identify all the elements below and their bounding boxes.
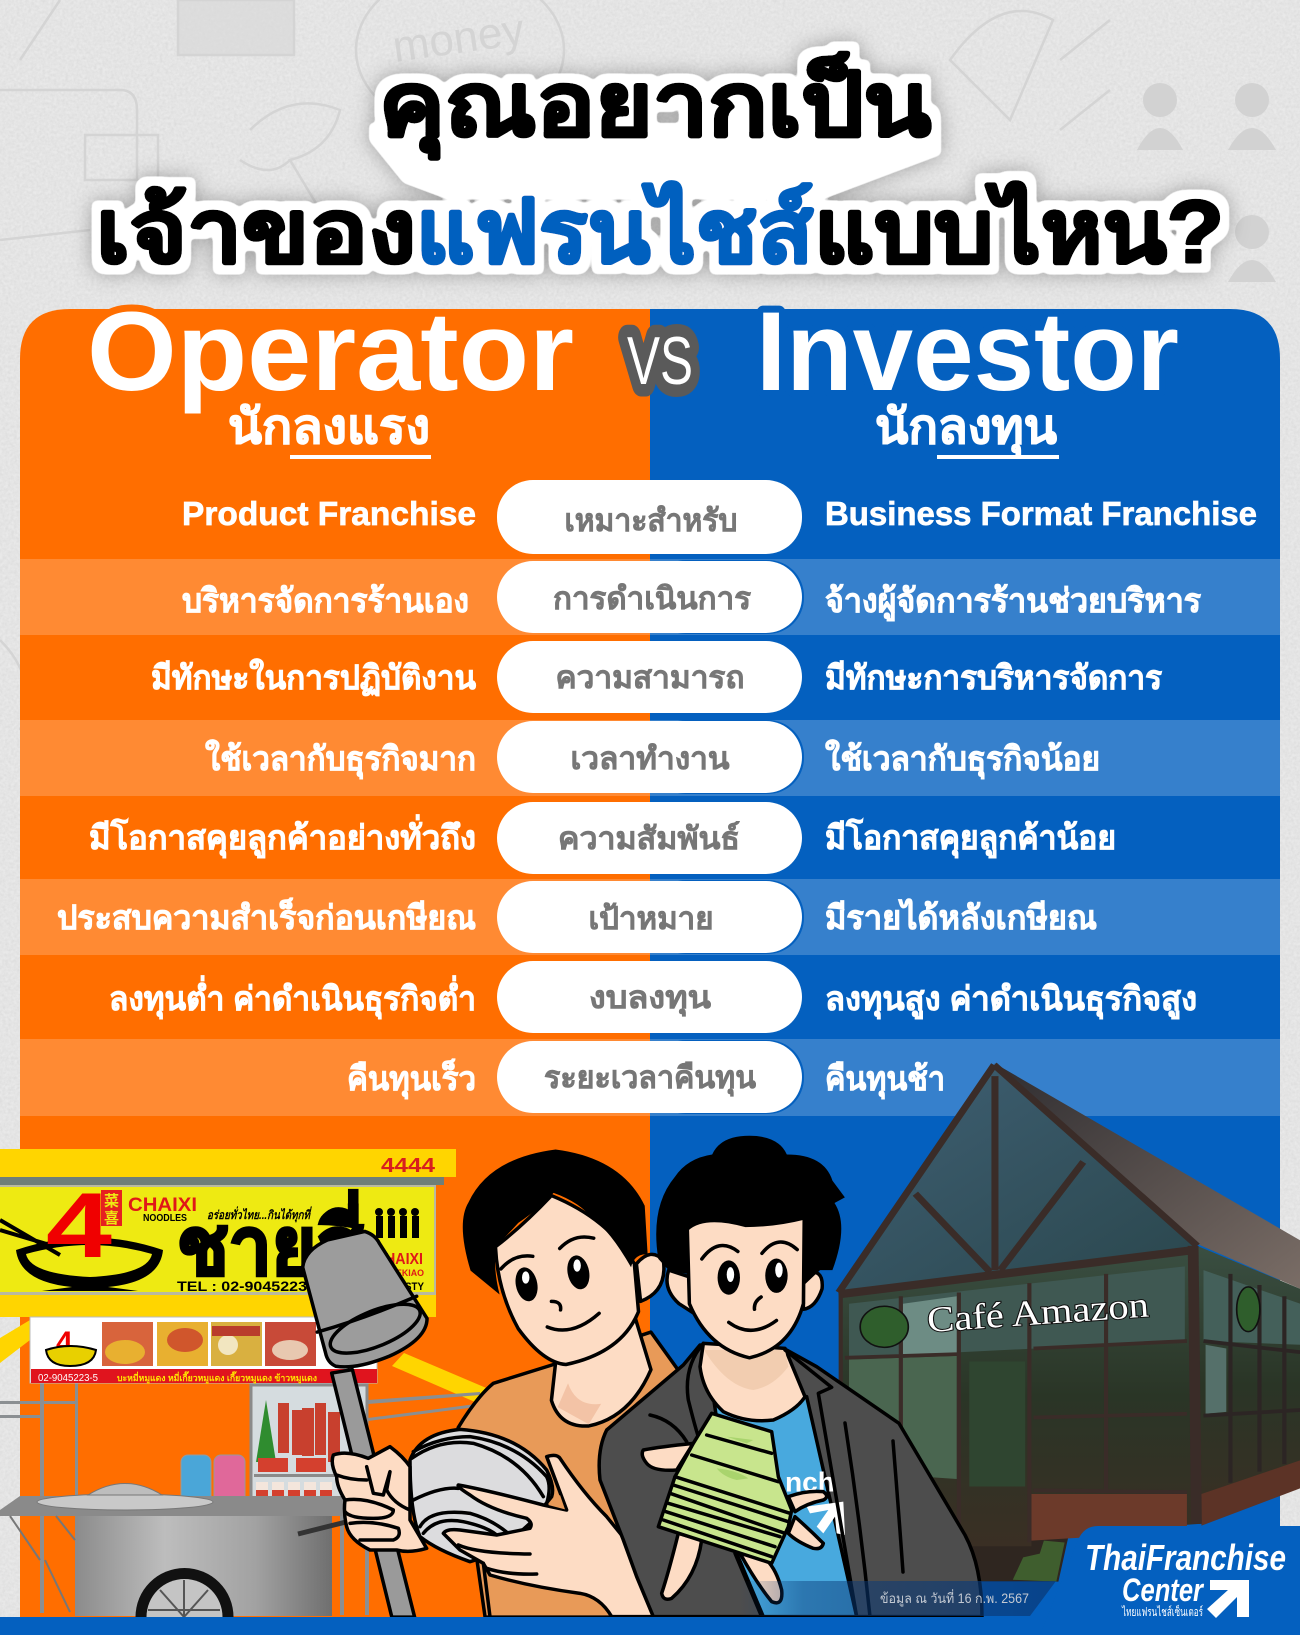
investor row labels: ใช้เวลากับธุรกิจน้อย xyxy=(825,739,1100,780)
investor row labels: Business Format Franchise xyxy=(825,495,1257,532)
face xyxy=(687,1218,804,1358)
operator row labels: Product Franchise xyxy=(182,495,476,532)
investor row labels: มีทักษะการบริหารจัดการ xyxy=(825,659,1162,696)
front wall xyxy=(839,1246,1201,1546)
pill labels: การดำเนินการ xyxy=(553,581,751,616)
sign board: 菜 xyxy=(104,1193,119,1210)
sign board: EKIAO xyxy=(396,1268,424,1278)
sign bowl xyxy=(16,1238,163,1291)
sign board: 喜 xyxy=(104,1209,119,1227)
menu board xyxy=(30,1317,377,1384)
jacket lines xyxy=(650,1343,903,1617)
operator row labels: บริหารจัดการร้านเอง xyxy=(182,582,469,619)
investor row labels: จ้างผู้จัดการร้านช่วยบริหาร xyxy=(825,582,1201,622)
sign board: NOODLES xyxy=(143,1213,187,1224)
sign board: 4 xyxy=(46,1175,112,1277)
operator row labels: คืนทุนเร็ว xyxy=(347,1058,476,1100)
ears xyxy=(667,1270,694,1313)
brows, nose, smile xyxy=(702,1242,797,1330)
cafe sign: Café Amazon xyxy=(926,1285,1150,1340)
sign board: HAIXI xyxy=(385,1251,423,1268)
building frame xyxy=(839,1065,1197,1542)
operator row labels: มีโอกาสคุยลูกค้าอย่างทั่วถึง xyxy=(89,814,476,859)
investor row labels: คืนทุนช้า xyxy=(825,1060,945,1100)
vs badge: VS xyxy=(627,323,693,399)
tiffin carriers xyxy=(181,1455,245,1508)
jacket xyxy=(599,1345,982,1617)
illustration: operator character xyxy=(303,1149,705,1617)
row stripes xyxy=(20,559,1280,1116)
logo: thaifranchise center xyxy=(1040,1526,1300,1635)
pill labels: งบลงทุน xyxy=(589,980,711,1017)
face xyxy=(495,1196,638,1365)
cart roof: 4444 xyxy=(381,1155,436,1177)
subheading: investor thai: นักลงทุน xyxy=(875,401,1057,457)
pill labels: เป้าหมาย xyxy=(588,901,714,936)
heading: Investor: Investor xyxy=(756,289,1179,414)
logo arrow xyxy=(1207,1580,1249,1618)
pill labels: เหมาะสำหรับ xyxy=(564,503,738,538)
sign board: ชายสี่ xyxy=(177,1190,363,1291)
neck xyxy=(700,1343,805,1421)
investor row labels: มีรายได้หลังเกษียณ xyxy=(825,898,1097,936)
sign board xyxy=(0,1175,436,1317)
title xyxy=(96,51,1224,281)
panel: investor side xyxy=(650,309,1280,1617)
title line 2: แบบไหน? xyxy=(814,182,1224,281)
footer date bar: ข้อมูล ณ วันที่ 16 ก.พ. 2567 xyxy=(880,1589,1029,1607)
panel: operator side xyxy=(20,309,650,1617)
logo: thaifranchise center: Center xyxy=(1122,1572,1204,1608)
cart roof xyxy=(0,1149,456,1185)
hair xyxy=(656,1136,845,1285)
pill labels: ความสามารถ xyxy=(556,660,744,695)
side wall xyxy=(1197,1246,1300,1526)
bottom bar xyxy=(0,1617,1300,1635)
cart wheel xyxy=(136,1568,234,1635)
pill labels xyxy=(544,503,756,1097)
investor row labels: ลงทุนสูง ค่าดำเนินธุรกิจสูง xyxy=(825,980,1197,1020)
stacked bowls xyxy=(410,1429,553,1562)
fingers xyxy=(642,1443,827,1603)
title line 1: คุณอยากเป็น xyxy=(379,51,931,160)
pill labels: เวลาทำงาน xyxy=(570,741,730,776)
ear xyxy=(636,1254,664,1301)
blue t-shirt xyxy=(713,1397,857,1617)
orange shirt xyxy=(458,1332,705,1617)
footer date bar xyxy=(740,1581,1056,1616)
sign board: อร่อยทั่วไทย...กินได้ทุกที่ xyxy=(207,1206,312,1223)
subheading: operator thai: นักลงแรง xyxy=(228,401,430,454)
logo: thaifranchise center: ไทยแฟรนไชส์เซ็นเตอร์ xyxy=(1121,1604,1203,1619)
brows, nose, smile xyxy=(501,1237,599,1330)
cafe logo xyxy=(860,1287,1260,1347)
illustration: investor character xyxy=(599,1136,982,1617)
ladle handle xyxy=(332,1370,415,1617)
eyes xyxy=(513,1254,592,1302)
blue t-shirt: nch xyxy=(785,1467,835,1498)
sign board: TEL : 02-9045223 xyxy=(177,1278,307,1294)
title line 2: แฟรนไชส์ xyxy=(416,182,813,281)
menu board: บะหมี่หมูแดง หมี่เกี๊ยวหมูแดง เกี๊ยวหมูแดง ข้าวหมูแดง xyxy=(117,1371,317,1384)
sign board: CHAIXI xyxy=(128,1195,197,1216)
operator row labels: ลงทุนต่ำ ค่าดำเนินธุรกิจต่ำ xyxy=(109,975,476,1020)
title line 2: เจ้าของ xyxy=(96,182,416,281)
operator row labels: ใช้เวลากับธุรกิจมาก xyxy=(205,739,476,780)
yellow struts xyxy=(0,1320,491,1402)
center pill column xyxy=(497,479,804,1114)
title line 2 xyxy=(96,182,1224,281)
menu board: 4 xyxy=(56,1326,73,1359)
cart table and pot xyxy=(0,1484,346,1616)
glass gable xyxy=(841,1069,1197,1293)
operator row labels xyxy=(57,495,476,1100)
display case xyxy=(251,1385,367,1508)
illustration: noodle cart xyxy=(0,1149,491,1635)
menu board: 02-9045223-5 xyxy=(38,1373,98,1384)
sign board: STY xyxy=(405,1281,425,1293)
hair xyxy=(463,1149,648,1295)
investor row labels: มีโอกาสคุยลูกค้าน้อย xyxy=(825,818,1116,859)
roof surface xyxy=(994,1063,1300,1289)
investor row labels xyxy=(825,495,1257,1100)
ladle cup xyxy=(303,1231,429,1367)
operator row labels: ประสบความสำเร็จก่อนเกษียณ xyxy=(57,897,476,936)
hand holding ladle xyxy=(332,1447,427,1551)
plant xyxy=(1013,1541,1065,1582)
pill labels: ระยะเวลาคืนทุน xyxy=(544,1060,756,1097)
floor xyxy=(957,1535,1069,1582)
eyes xyxy=(718,1259,788,1295)
neck xyxy=(551,1315,651,1426)
pill labels: ความสัมพันธ์ xyxy=(558,821,740,856)
heading: Operator: Operator xyxy=(87,289,574,414)
hand holding bowls xyxy=(443,1455,663,1617)
illustration: cafe amazon building xyxy=(839,1063,1300,1582)
background paper texture: money xyxy=(390,5,527,72)
operator row labels: มีทักษะในการปฏิบัติงาน xyxy=(151,658,476,696)
frame poles xyxy=(0,1383,480,1615)
banknote bundle xyxy=(658,1413,792,1563)
